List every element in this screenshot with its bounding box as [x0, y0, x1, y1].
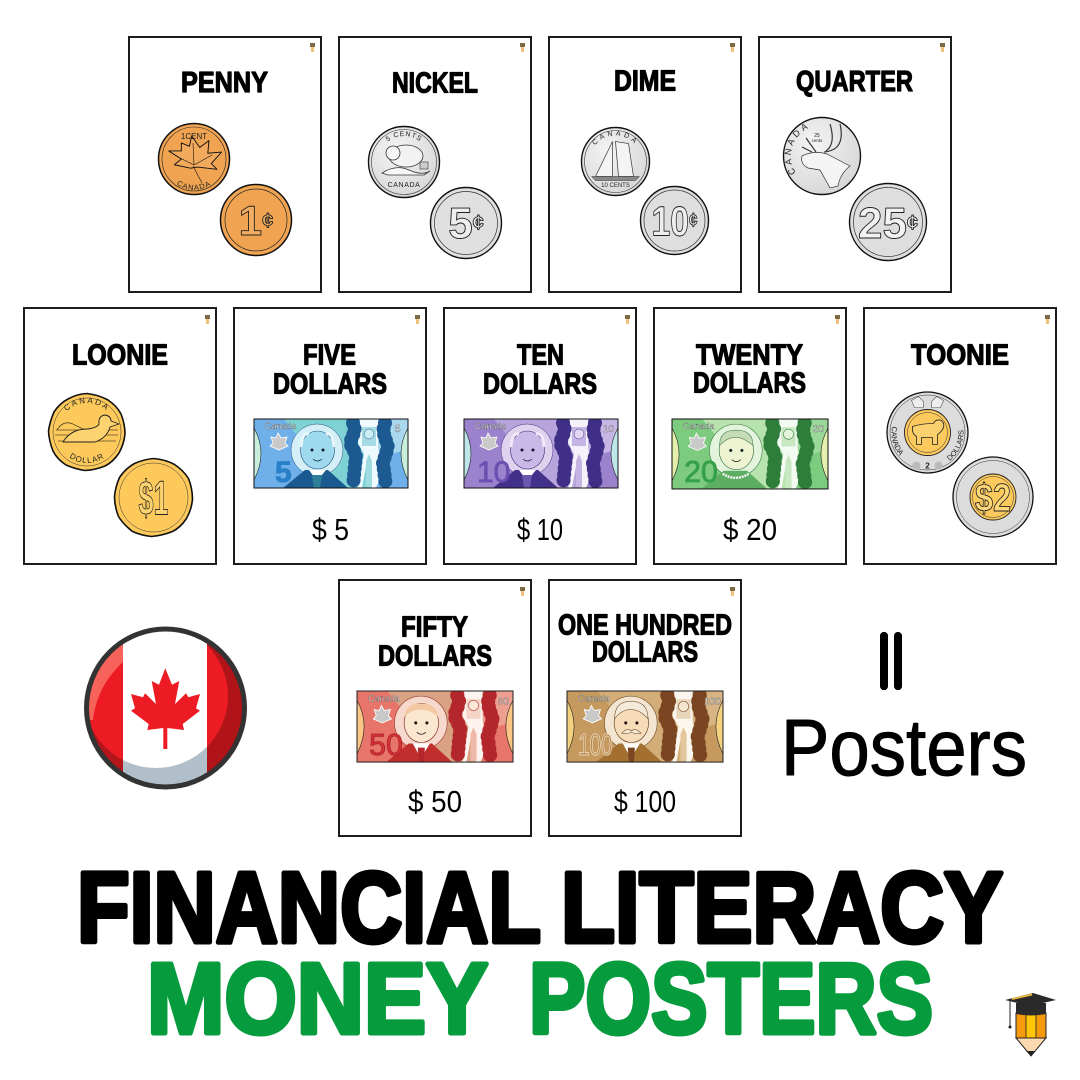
banknote: five dollars: 5 — [275, 456, 292, 489]
icon: penny front coin: CANADA — [178, 181, 211, 190]
icon: nickel front coin: 5 CENTS — [386, 131, 422, 141]
heading: loonie: LOONIE — [72, 340, 168, 372]
icon: penny back coin: ¢ — [262, 210, 273, 232]
subtitle: MONEY — [147, 943, 488, 1055]
heading: quarter: QUARTER — [796, 66, 913, 98]
subtitle: POSTERS — [529, 943, 933, 1055]
banknote: ten dollars — [464, 419, 618, 489]
subtitle — [147, 943, 933, 1055]
icon: loonie back coin — [114, 458, 192, 536]
icon: quarter front coin: 25 — [814, 133, 820, 139]
icon: penny back coin: 1 — [239, 197, 262, 244]
icon: quarter front coin: cents — [812, 138, 823, 143]
title — [77, 852, 1003, 964]
icon: dime front coin: 10 CENTS — [601, 183, 630, 189]
poster: five dollars — [234, 308, 426, 564]
banknote: twenty dollars: 20 — [813, 424, 824, 435]
banknote: one hundred dollars — [567, 691, 723, 762]
icon: penny back coin — [220, 184, 292, 256]
poster: fifty dollars — [339, 580, 531, 836]
banknote: five dollars: 5 — [395, 424, 401, 435]
banknote: twenty dollars: Canada — [683, 421, 715, 431]
poster: toonie — [863, 307, 1057, 565]
icon: dime front coin: CANADA — [592, 130, 636, 144]
icon: nickel back coin — [430, 188, 502, 258]
icon: quarter back coin: 25 — [858, 199, 907, 248]
poster: one hundred dollars: DOLLARS — [592, 636, 698, 668]
banknote: fifty dollars: 50 — [369, 728, 403, 762]
callout: 11 posters: 11 — [860, 614, 921, 708]
amount: five dollars: $ 5 — [312, 512, 349, 547]
banknote: fifty dollars — [357, 691, 513, 762]
icon: dime back coin — [640, 186, 708, 254]
icon: loonie front coin: CANADA — [64, 398, 108, 410]
heading: penny: PENNY — [181, 67, 268, 99]
poster: one hundred dollars — [549, 580, 741, 836]
heading: ten dollars: TEN — [517, 340, 564, 372]
icon: nickel front coin: CANADA — [388, 182, 420, 189]
amount: twenty dollars: $ 20 — [723, 512, 777, 547]
icon: toonie back coin: $2 — [975, 477, 1011, 520]
heading: fifty dollars: FIFTY — [401, 612, 468, 644]
poster: ten dollars — [444, 308, 636, 564]
icon: toonie front coin: 2 — [925, 462, 930, 470]
title: FINANCIAL — [77, 852, 541, 964]
banknote: five dollars: Canada — [265, 421, 296, 431]
poster: twenty dollars: DOLLARS — [693, 368, 806, 400]
icon: pencil with graduation cap logo — [1005, 993, 1056, 1056]
poster: dime — [548, 36, 742, 293]
banknote: one hundred dollars: 100 — [578, 728, 613, 762]
icon: nickel back coin: ¢ — [473, 212, 484, 234]
icon: toonie front coin: DOLLARS — [946, 430, 964, 461]
heading: twenty dollars: TWENTY — [696, 340, 803, 372]
amount: ten dollars: $ 10 — [517, 512, 563, 547]
heading: five dollars: FIVE — [303, 340, 356, 372]
icon: toonie front coin — [886, 391, 969, 474]
poster: loonie — [23, 307, 217, 565]
poster: nickel — [338, 36, 532, 293]
icon: dime back coin: 10 — [652, 198, 689, 244]
icon: penny front coin: 1CENT — [181, 132, 207, 141]
poster: quarter — [758, 36, 952, 293]
banknote: ten dollars: 10 — [477, 456, 510, 489]
title: LITERACY — [561, 852, 1003, 964]
callout: 11 posters: Posters — [781, 703, 1027, 792]
amount: one hundred dollars: $ 100 — [614, 784, 676, 819]
callout: 11 posters — [786, 632, 1025, 776]
banknote: ten dollars: 10 — [603, 424, 615, 435]
icon: dime back coin: ¢ — [689, 210, 698, 232]
banknote: twenty dollars — [672, 419, 828, 489]
poster: five dollars: DOLLARS — [273, 368, 387, 400]
icon: nickel back coin: 5 — [448, 199, 473, 248]
heading: dime: DIME — [614, 66, 676, 98]
heading: nickel: NICKEL — [392, 68, 478, 100]
icon: dime front coin — [580, 126, 650, 196]
poster: penny — [128, 36, 322, 293]
icon: nickel front coin — [368, 126, 440, 198]
icon: penny front coin — [158, 122, 230, 196]
banknote: one hundred dollars: Canada — [578, 693, 610, 703]
banknote: five dollars — [254, 419, 408, 489]
poster: ten dollars: DOLLARS — [483, 368, 597, 400]
banknote: fifty dollars: 50 — [498, 696, 509, 707]
icon: quarter front coin — [782, 116, 862, 196]
heading: one hundred dollars: ONE HUNDRED — [558, 610, 732, 642]
icon: quarter front coin: CANADA — [784, 124, 808, 174]
poster: fifty dollars: DOLLARS — [378, 640, 492, 672]
icon: toonie back coin — [953, 457, 1033, 537]
icon: toonie front coin: CANADA — [891, 426, 903, 456]
amount: fifty dollars: $ 50 — [408, 784, 462, 819]
banknote: ten dollars: Canada — [475, 421, 506, 431]
banknote: twenty dollars: 20 — [684, 455, 718, 489]
icon: quarter back coin — [850, 184, 926, 260]
banknote: fifty dollars: Canada — [368, 693, 400, 703]
icon: quarter back coin: ¢ — [907, 212, 918, 234]
icon: canadian flag badge — [84, 620, 248, 790]
icon: loonie front coin — [48, 392, 126, 472]
heading: toonie: TOONIE — [911, 340, 1009, 372]
icon: loonie back coin: $1 — [138, 472, 168, 526]
icon: maple leaf — [131, 668, 200, 749]
banknote: one hundred dollars: 100 — [704, 696, 721, 707]
icon: loonie front coin: DOLLAR — [70, 453, 104, 463]
poster: twenty dollars — [654, 308, 846, 564]
